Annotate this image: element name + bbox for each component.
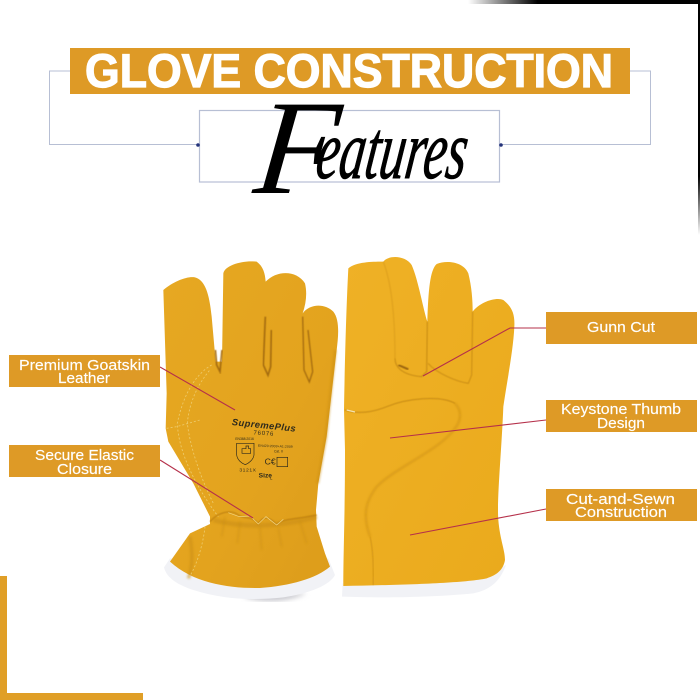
pointer lines xyxy=(160,328,546,535)
left glove printed brand: 3121X xyxy=(239,467,257,473)
left glove printed brand: L xyxy=(270,475,273,480)
label: secure elastic closure xyxy=(9,445,160,478)
left glove stitching xyxy=(167,365,218,578)
left glove finger creases xyxy=(215,317,313,382)
label: premium goatskin leather: Leather xyxy=(58,371,110,387)
left glove printed brand: 76076 xyxy=(253,430,274,438)
left glove xyxy=(163,261,338,601)
left glove printed brand: SupremePlus xyxy=(231,417,296,434)
label: keystone thumb design: Design xyxy=(597,416,645,432)
title: glove construction: GLOVE CONSTRUCTION xyxy=(85,44,613,97)
left glove edge shading xyxy=(188,350,335,578)
left glove printed brand: EN420:2003+A1:2009 xyxy=(258,444,293,449)
subtitle: features script xyxy=(248,73,474,223)
label: premium goatskin leather: Premium Goatskin xyxy=(19,358,150,374)
subtitle: features script: F xyxy=(248,73,348,223)
decorative corner: bottom left gold frame xyxy=(0,576,143,700)
left glove printed brand xyxy=(231,417,296,480)
right glove body xyxy=(343,257,514,586)
label: premium goatskin leather xyxy=(9,355,160,387)
right glove xyxy=(342,257,514,597)
label: gunn cut: Gunn Cut xyxy=(587,320,655,336)
left glove printed brand: EN388:2016 xyxy=(235,437,254,441)
left glove body xyxy=(163,261,338,588)
decorative corner: top right black frame xyxy=(468,0,700,235)
label: cut-and-sewn construction: Cut-and-Sewn xyxy=(566,492,675,508)
left glove printed brand: Size xyxy=(259,472,272,479)
label: cut-and-sewn construction xyxy=(546,489,697,521)
subtitle box xyxy=(196,110,503,182)
subtitle: features script: eatures xyxy=(311,104,474,197)
left glove printed brand: Cat. II xyxy=(274,450,283,454)
label: secure elastic closure: Secure Elastic xyxy=(35,448,134,464)
title bracket lines xyxy=(50,71,650,144)
left glove cuff xyxy=(243,593,307,601)
label: keystone thumb design: Keystone Thumb xyxy=(561,402,681,418)
right glove cuff xyxy=(342,565,506,597)
left glove printed brand: C€ xyxy=(265,457,276,467)
label: cut-and-sewn construction: Construction xyxy=(575,505,667,521)
right glove thumb highlight xyxy=(347,365,408,412)
label: keystone thumb design xyxy=(546,400,697,432)
label: secure elastic closure: Closure xyxy=(57,462,112,478)
label: gunn cut xyxy=(546,312,697,344)
left glove elastic gather xyxy=(210,512,317,550)
right glove seams xyxy=(345,262,473,585)
